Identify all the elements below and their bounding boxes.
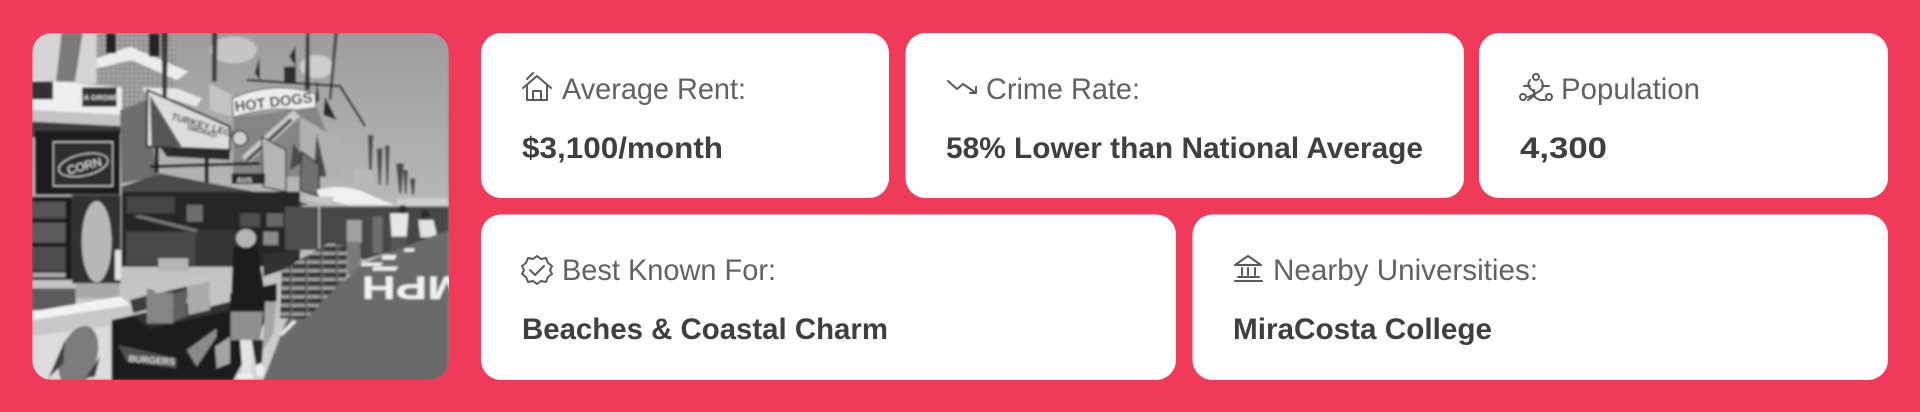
turkey leg sign bbox=[147, 90, 230, 150]
printed table banner bbox=[118, 345, 177, 368]
card: best known for: Best Known For: bbox=[562, 254, 776, 287]
card: nearby universities: MiraCosta College bbox=[1233, 313, 1492, 346]
icon: verified badge bbox=[522, 256, 552, 284]
card: average rent: Average Rent: bbox=[562, 73, 746, 106]
icon: university building bbox=[1235, 256, 1262, 281]
card: nearby universities: Nearby Universities: bbox=[1273, 254, 1538, 287]
photo: black and white street fair with food stalls: CA GROWN bbox=[79, 93, 120, 102]
corn sign bbox=[35, 131, 120, 195]
distant palm trees bbox=[368, 135, 415, 195]
photo: black and white street fair with food stalls: SMOKED bbox=[186, 125, 218, 140]
icon: community bbox=[1520, 74, 1552, 100]
drinks cooler bbox=[32, 197, 72, 280]
card: average rent bbox=[481, 33, 889, 198]
card: average rent: $3,100/month bbox=[522, 132, 723, 165]
card: crime rate: Crime Rate: bbox=[986, 73, 1140, 106]
photo: black and white street fair with food stalls: TURKEY LEGS bbox=[170, 112, 239, 141]
hot dog banner bbox=[209, 83, 232, 117]
photo: black and white street fair with food stalls: CORN bbox=[66, 155, 103, 177]
crowd bbox=[320, 207, 449, 260]
card: population bbox=[1479, 33, 1888, 198]
card: crime rate: 58% Lower than National Average bbox=[946, 132, 1423, 165]
shopper bbox=[263, 302, 277, 350]
photo: black and white street fair with food stalls: BURGERS bbox=[128, 354, 175, 367]
photo: black and white street fair with food stalls bbox=[32, 33, 467, 392]
card: best known for: Beaches & Coastal Charm bbox=[522, 313, 888, 346]
white sign panel bbox=[32, 79, 122, 115]
icon: house bbox=[523, 73, 551, 100]
canopy and stall bbox=[122, 173, 308, 207]
white market umbrellas bbox=[317, 187, 395, 205]
bottles and counter bbox=[32, 288, 76, 310]
card: population: Population bbox=[1561, 73, 1700, 106]
card: population: 4,300 bbox=[1520, 132, 1607, 165]
photo: black and white street fair with food stalls: HOT DOGS bbox=[234, 90, 314, 116]
stacked sacks bbox=[280, 243, 347, 318]
card: crime rate bbox=[906, 33, 1464, 198]
trees behind stalls bbox=[120, 100, 157, 183]
road bbox=[263, 230, 449, 380]
photo: black and white street fair with food stalls: MPH bbox=[362, 270, 467, 306]
card: best known for bbox=[481, 214, 1176, 380]
surfboard-shaped corn display bbox=[82, 201, 112, 282]
card: nearby universities bbox=[1192, 214, 1888, 380]
icon: trend down bbox=[948, 81, 976, 93]
counter and boxes bbox=[129, 283, 209, 314]
photo: black and white street fair with food stalls: AUS bbox=[237, 176, 252, 185]
